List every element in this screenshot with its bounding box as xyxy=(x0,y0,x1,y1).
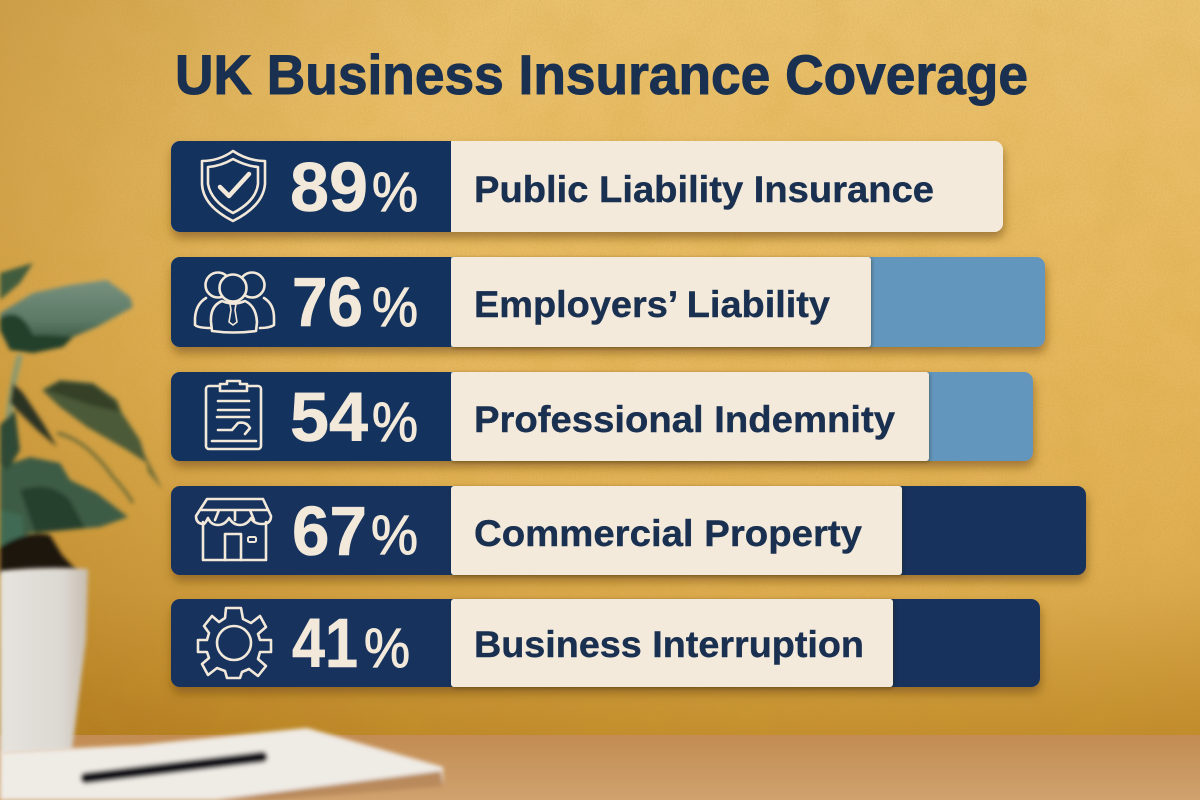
notebook xyxy=(0,728,443,800)
title: UK Business Insurance Coverage xyxy=(175,43,1028,106)
bar track xyxy=(171,257,1045,347)
row: business interruption xyxy=(171,599,1040,687)
row: public liability insurance xyxy=(171,141,1003,232)
percent panel xyxy=(171,141,451,232)
icon: gear xyxy=(198,608,271,678)
value: 76 xyxy=(292,263,363,341)
label panel xyxy=(451,257,871,347)
plant soil xyxy=(0,534,78,574)
notebook and pen xyxy=(0,728,443,800)
row: employers' liability xyxy=(171,257,1045,347)
value: 41 xyxy=(292,604,358,682)
percent sign: % xyxy=(371,503,418,566)
percent sign: % xyxy=(372,390,418,453)
row: professional indemnity xyxy=(171,372,1033,461)
percent sign: % xyxy=(364,616,410,679)
pen xyxy=(86,757,262,778)
row: commercial property xyxy=(171,486,1086,575)
label: Business Interruption xyxy=(474,624,864,665)
percent panel xyxy=(171,257,451,347)
plant leaves xyxy=(0,263,163,548)
icon: team of people xyxy=(195,272,274,332)
icon: shop front xyxy=(196,499,271,560)
label panel xyxy=(451,486,902,575)
label panel xyxy=(451,599,893,687)
label: Commercial Property xyxy=(474,513,862,554)
wooden table xyxy=(0,735,1200,800)
bar track xyxy=(171,599,1040,687)
label panel xyxy=(451,141,1003,232)
value: 54 xyxy=(290,378,368,456)
plant stems xyxy=(57,433,133,503)
icon: clipboard xyxy=(206,381,261,449)
plant pot xyxy=(0,568,88,754)
icon: shield with check xyxy=(202,151,265,221)
bar track xyxy=(171,141,1003,232)
value: 67 xyxy=(292,492,367,570)
bar track xyxy=(171,486,1086,575)
percent panel xyxy=(171,372,451,461)
value: 89 xyxy=(290,148,368,226)
bar track xyxy=(171,372,1033,461)
label: Employers’ Liability xyxy=(474,284,830,325)
plant xyxy=(0,263,163,574)
label panel xyxy=(451,372,929,461)
label: Public Liability Insurance xyxy=(474,169,934,210)
percent sign: % xyxy=(372,275,418,338)
label: Professional Indemnity xyxy=(474,399,895,440)
percent sign: % xyxy=(372,160,418,223)
